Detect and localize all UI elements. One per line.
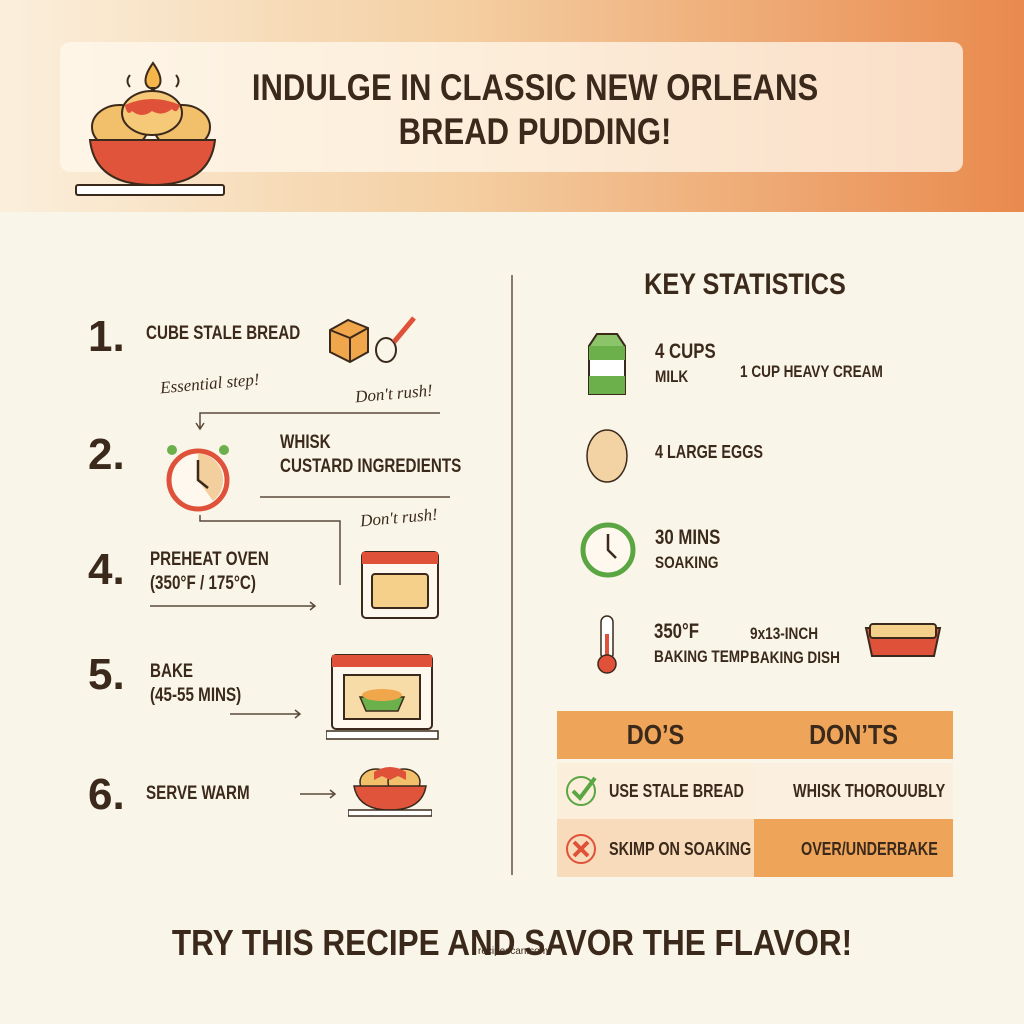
table: do's and don'ts: DO’S <box>627 719 684 750</box>
divider <box>511 275 513 875</box>
stat: milk: MILK <box>655 367 688 386</box>
step 2 <box>88 430 461 512</box>
table: do's and don'ts: WHISK THOROUUBLY <box>793 781 945 801</box>
title: INDULGE IN CLASSIC NEW ORLEANS <box>252 67 818 108</box>
step 5 <box>88 650 439 740</box>
icon: timer <box>166 445 230 512</box>
step 4: 4. <box>88 545 125 594</box>
step 2: WHISK <box>280 432 331 453</box>
step 4: (350°F / 175°C) <box>150 573 256 594</box>
title panel <box>60 42 963 172</box>
step 2: CUSTARD INGREDIENTS <box>280 456 461 477</box>
stat: milk: 4 CUPS <box>655 340 716 363</box>
icon: oven with dish <box>326 654 439 740</box>
step 1: 1. <box>88 312 125 361</box>
stat: temperature and dish: 9x13-INCH <box>750 624 818 643</box>
step 1: Essential step! <box>159 370 260 397</box>
panel: steps: Don't rush! <box>359 505 438 530</box>
title <box>252 67 818 152</box>
connector lines <box>199 496 450 585</box>
stat: temperature and dish: BAKING TEMP <box>654 647 749 666</box>
stat: temperature and dish: BAKING DISH <box>750 648 840 667</box>
stat: milk: 1 CUP HEAVY CREAM <box>740 362 883 381</box>
heading: key statistics: KEY STATISTICS <box>644 268 846 301</box>
stat: temperature and dish: 350°F <box>654 620 699 643</box>
table: do's and don'ts <box>557 711 953 877</box>
step 1: CUBE STALE BREAD <box>146 323 300 344</box>
stat: soaking: SOAKING <box>655 553 718 572</box>
stat: soaking <box>580 522 720 578</box>
table: do's and don'ts: DON’TS <box>809 719 898 750</box>
icon: cube and whisk <box>329 316 416 364</box>
step 4: PREHEAT OVEN <box>150 549 269 570</box>
header band <box>0 0 1024 212</box>
stat: milk <box>588 333 883 395</box>
step 5: (45-55 MINS) <box>150 685 241 706</box>
panel: steps: Don't rush! <box>354 381 433 406</box>
panel: steps <box>88 312 461 819</box>
table: do's and don'ts: USE STALE BREAD <box>609 781 744 801</box>
stat: temperature and dish <box>597 615 942 674</box>
icon: oven <box>361 551 439 619</box>
table: do's and don'ts: OVER/UNDERBAKE <box>801 839 938 859</box>
step 2: 2. <box>88 430 125 479</box>
footer call to action: TRY THIS RECIPE AND SAVOR THE FLAVOR! <box>172 922 852 963</box>
table: do's and don'ts: SKIMP ON SOAKING <box>609 839 751 859</box>
step 5: BAKE <box>150 661 193 682</box>
step 6 <box>88 767 432 819</box>
icon: check <box>566 776 596 806</box>
step 5: 5. <box>88 650 125 699</box>
stat: eggs: 4 LARGE EGGS <box>655 442 763 462</box>
title: BREAD PUDDING! <box>399 111 671 152</box>
stat: soaking: 30 MINS <box>655 526 720 549</box>
icon: serving bowl <box>348 767 432 817</box>
icon: bread pudding bowl <box>75 61 225 196</box>
step 6: 6. <box>88 770 125 819</box>
stat: eggs <box>586 429 763 483</box>
step 4 <box>88 545 439 619</box>
step 1 <box>88 312 433 406</box>
arrow connector <box>195 412 440 430</box>
step 6: SERVE WARM <box>146 783 250 804</box>
icon: cross <box>566 834 596 864</box>
watermark: recipescan.com <box>478 946 548 957</box>
